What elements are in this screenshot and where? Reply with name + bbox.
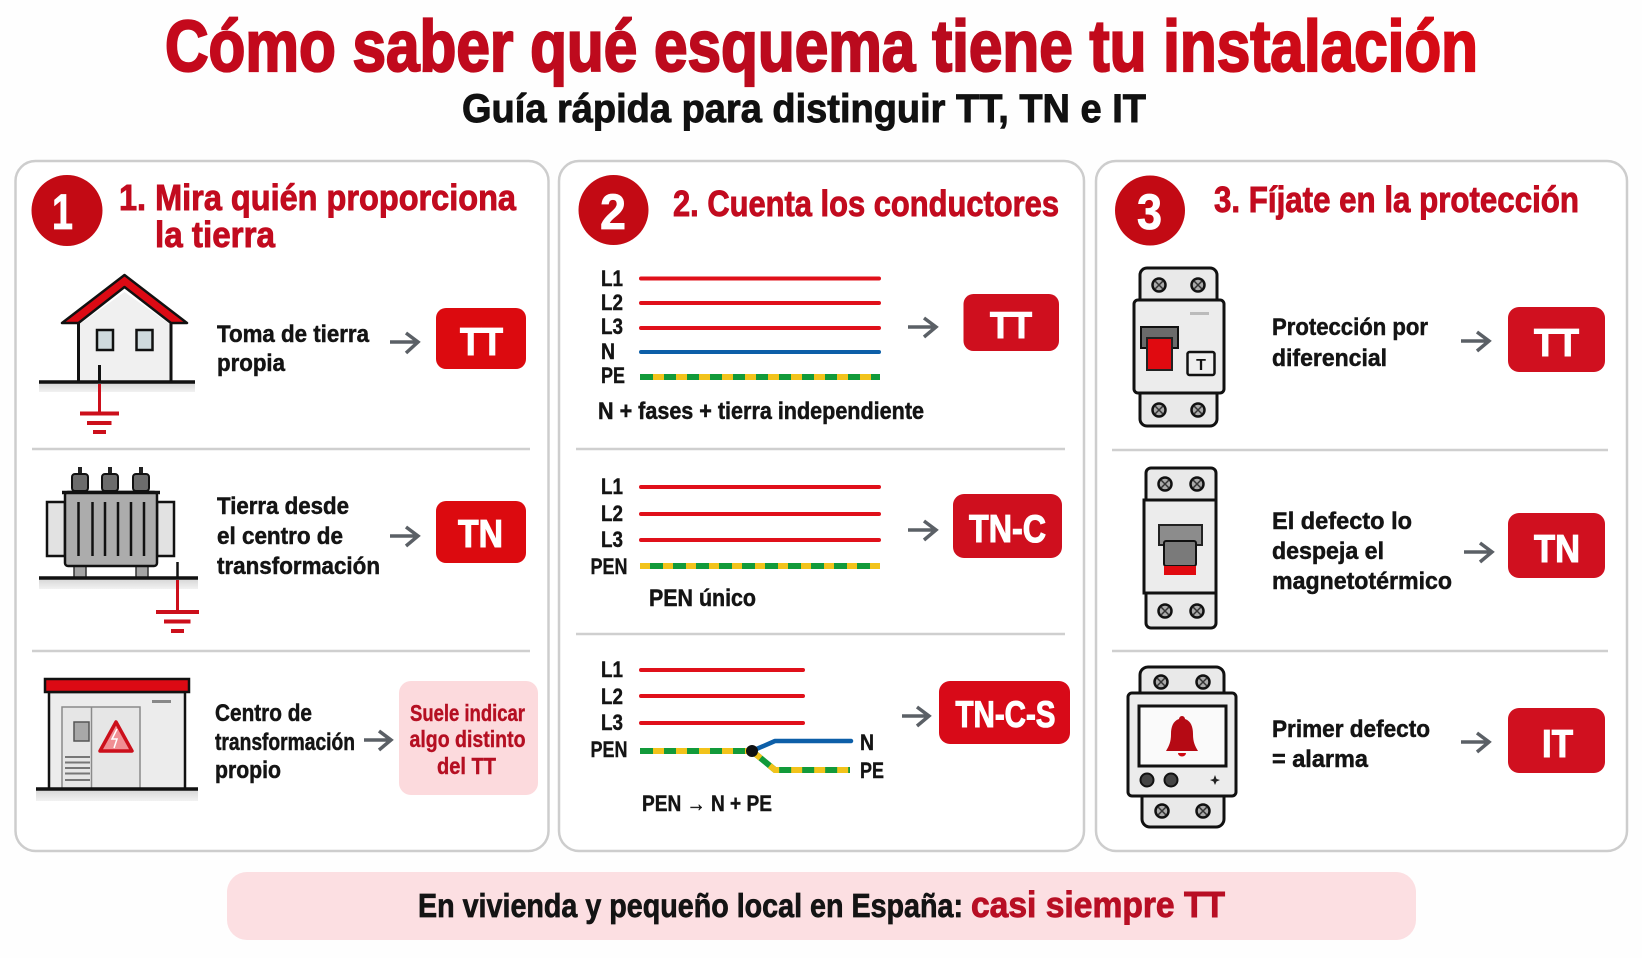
caption: PEN to N + PE: PEN → N + PE bbox=[642, 791, 772, 816]
icon: transformation centre building bbox=[36, 679, 198, 801]
arrow bbox=[364, 731, 391, 750]
text: el defecto lo despeja el magnetotermico: magnetotérmico bbox=[1272, 568, 1452, 595]
badge TT bbox=[436, 308, 526, 369]
badge IT bbox=[1508, 708, 1605, 773]
subtitle: Guía rápida para distinguir TT, TN e IT bbox=[462, 87, 1146, 131]
badge TN-C: TN-C bbox=[969, 508, 1046, 551]
text: centro de transformacion propio: transformación bbox=[215, 729, 355, 756]
diagram: TN-C-S conductors: L3 bbox=[601, 710, 623, 735]
diagram: TT conductors: PE bbox=[601, 363, 625, 388]
footer banner: casi siempre TT bbox=[971, 884, 1225, 925]
heading 1 bbox=[119, 177, 517, 255]
badge TT: TT bbox=[1534, 322, 1579, 365]
arrow bbox=[390, 333, 418, 353]
step number 1 bbox=[32, 175, 102, 246]
diagram: TN-C-S conductors bbox=[590, 657, 884, 783]
text: tierra desde el centro de transformacion: transformación bbox=[217, 553, 380, 580]
caption: PEN unico: PEN único bbox=[649, 585, 756, 612]
step number 1: 1 bbox=[52, 184, 73, 240]
diagram: TT conductors: L1 bbox=[601, 266, 623, 291]
step number 2 bbox=[578, 175, 648, 245]
diagram: TN-C conductors: L2 bbox=[601, 501, 623, 526]
diagram: TN-C-S conductors: L1 bbox=[601, 657, 623, 682]
callout: suele indicar algo distinto del TT bbox=[399, 681, 538, 795]
badge TT bbox=[964, 294, 1059, 351]
icon: residual current device: T bbox=[1196, 357, 1206, 374]
heading 1: la tierra bbox=[155, 214, 276, 255]
text: el defecto lo despeja el magnetotermico: El defecto lo bbox=[1272, 508, 1412, 535]
badge TT: TT bbox=[990, 305, 1032, 346]
icon: residual current device bbox=[1134, 268, 1224, 426]
diagram: TN-C conductors: L3 bbox=[601, 527, 623, 552]
text: tierra desde el centro de transformacion bbox=[217, 493, 380, 580]
panel: 2. count the conductors bbox=[559, 161, 1084, 851]
panel: 3. check the protection bbox=[1096, 161, 1627, 851]
text: el defecto lo despeja el magnetotermico: despeja el bbox=[1272, 538, 1384, 565]
diagram: TT conductors: L2 bbox=[601, 290, 623, 315]
footer banner: En vivienda y pequeño local en España: bbox=[418, 887, 963, 924]
text: el defecto lo despeja el magnetotermico bbox=[1272, 508, 1452, 595]
callout: suele indicar algo distinto del TT: del TT bbox=[437, 753, 496, 779]
text: centro de transformacion propio: Centro de bbox=[215, 700, 312, 727]
diagram: TN-C conductors bbox=[590, 474, 880, 579]
diagram: TN-C conductors: L1 bbox=[601, 474, 623, 499]
arrow bbox=[1461, 332, 1489, 351]
text: tierra desde el centro de transformacion: Tierra desde bbox=[217, 493, 349, 520]
badge TN-C-S: TN-C-S bbox=[956, 694, 1056, 735]
text: primer defecto = alarma: = alarma bbox=[1272, 746, 1369, 773]
badge TT bbox=[1508, 307, 1605, 372]
diagram: TT conductors: N bbox=[601, 339, 615, 364]
step number 3: 3 bbox=[1137, 184, 1162, 240]
badge TN bbox=[436, 501, 526, 563]
step number 3 bbox=[1115, 176, 1185, 246]
diagram: TN-C-S conductors: L2 bbox=[601, 684, 623, 709]
diagram: TN-C-S conductors: N bbox=[860, 730, 874, 755]
icon: insulation monitor with alarm bell bbox=[1128, 667, 1236, 827]
badge TN bbox=[1508, 513, 1605, 578]
text: proteccion por diferencial bbox=[1272, 314, 1428, 372]
text: toma de tierra propia bbox=[217, 321, 370, 377]
footer banner bbox=[227, 872, 1416, 940]
panel 2 frame bbox=[559, 161, 1084, 851]
panel 3 frame bbox=[1096, 161, 1627, 851]
caption: N + fases + tierra independiente: N + fases + tierra independiente bbox=[598, 398, 924, 425]
callout: suele indicar algo distinto del TT: algo distinto bbox=[410, 726, 526, 752]
arrow bbox=[1461, 733, 1489, 752]
badge TN-C-S bbox=[939, 681, 1070, 744]
text: primer defecto = alarma bbox=[1272, 716, 1430, 773]
text: primer defecto = alarma: Primer defecto bbox=[1272, 716, 1430, 743]
badge TN: TN bbox=[1534, 528, 1580, 571]
text: proteccion por diferencial: Protección por bbox=[1272, 314, 1428, 341]
heading 1: 1. Mira quién proporciona bbox=[119, 177, 517, 218]
diagram: TT conductors bbox=[601, 266, 880, 388]
text: toma de tierra propia: propia bbox=[217, 350, 286, 377]
diagram: TN-C-S conductors: PEN bbox=[590, 737, 628, 762]
heading 3: 3. Fíjate en la protección bbox=[1214, 179, 1579, 220]
text: centro de transformacion propio bbox=[215, 700, 355, 784]
text: centro de transformacion propio: propio bbox=[215, 757, 281, 784]
diagram: TN-C-S conductors: PE bbox=[860, 758, 884, 783]
arrow bbox=[908, 318, 936, 337]
arrow bbox=[1464, 543, 1492, 562]
arrow bbox=[908, 521, 936, 540]
text: proteccion por diferencial: diferencial bbox=[1272, 345, 1387, 372]
badge IT: IT bbox=[1542, 723, 1573, 766]
icon: house with earth bbox=[39, 275, 195, 432]
step number 2: 2 bbox=[600, 184, 626, 240]
panel: 1. who provides earth bbox=[16, 161, 548, 851]
badge TN-C bbox=[953, 494, 1062, 558]
diagram: TN-C conductors: PEN bbox=[590, 554, 628, 579]
callout: suele indicar algo distinto del TT: Suele indicar bbox=[410, 700, 525, 726]
text: tierra desde el centro de transformacion: el centro de bbox=[217, 523, 343, 550]
badge TT: TT bbox=[460, 321, 503, 364]
arrow bbox=[390, 527, 418, 546]
heading 2: 2. Cuenta los conductores bbox=[673, 183, 1059, 224]
badge TN: TN bbox=[458, 513, 503, 556]
panel 1 frame bbox=[16, 161, 548, 851]
arrow bbox=[902, 707, 929, 726]
diagram: TT conductors: L3 bbox=[601, 314, 623, 339]
icon: circuit breaker bbox=[1144, 468, 1216, 628]
icon: transformer with earth bbox=[39, 467, 199, 631]
text: toma de tierra propia: Toma de tierra bbox=[217, 321, 370, 348]
